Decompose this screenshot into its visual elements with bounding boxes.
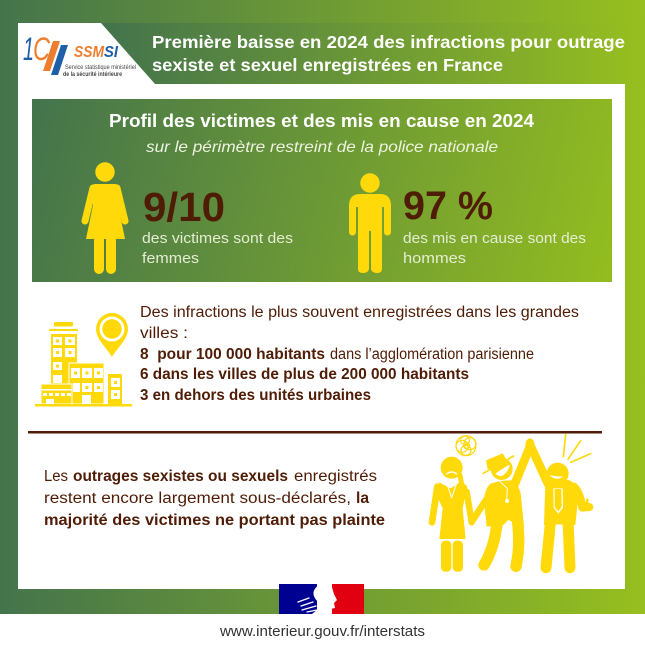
text block: urban distribution: 8 pour 100 000 habitants — [140, 346, 325, 363]
icon: man — [349, 173, 391, 273]
text block: urban distribution — [140, 304, 579, 404]
icon: three figures, woman upset and men high-fiving — [432, 434, 591, 572]
stat label: women victims — [142, 230, 293, 267]
text block: under-reporting: Les — [44, 468, 68, 485]
text block: under-reporting: la — [356, 490, 369, 507]
stat label: women victims: des victimes sont des — [142, 230, 293, 247]
logo: SSMSI: Service statistique ministériel — [65, 65, 136, 71]
stat: 97 %: 97 % — [403, 184, 493, 228]
logo: SSMSI: SSM — [74, 44, 105, 61]
text block: urban distribution: villes : — [140, 325, 188, 342]
title: sexiste et sexuel enregistrées en France — [152, 55, 503, 75]
text block: under-reporting: outrages sexistes ou sexuels — [73, 468, 288, 485]
text block: urban distribution: 3 en dehors des unités urbaines — [140, 387, 371, 404]
shout lines — [563, 434, 591, 462]
icon: woman — [85, 162, 125, 274]
text block: urban distribution: dans l’agglomération parisienne — [330, 346, 534, 363]
text block: urban distribution: Des infractions le plus souvent enregistrées dans les grandes — [140, 304, 579, 321]
logo: French Republic flag — [279, 584, 364, 614]
icon: city buildings with map pin — [35, 313, 132, 406]
text block: under-reporting: enregistrés — [294, 468, 377, 485]
logo: SSMSI: SI — [104, 44, 119, 61]
scribble: anger — [456, 436, 476, 456]
text block: under-reporting: majorité des victimes ne portant pas plainte — [44, 512, 385, 529]
stat: 9/10: 9/10 — [143, 184, 225, 230]
footer URL: www.interieur.gouv.fr/interstats — [219, 623, 425, 640]
text block: under-reporting — [44, 468, 385, 529]
panel subheading: sur le périmètre restreint de la police nationale — [146, 139, 498, 156]
logo: SSMSI: 1 — [23, 31, 34, 67]
man with tie figure — [532, 448, 589, 568]
logo: SSMSI — [23, 31, 136, 78]
stat label: women victims: femmes — [142, 250, 199, 267]
woman figure — [432, 457, 472, 572]
panel heading: Profil des victimes et des mis en cause en 2024 — [109, 110, 535, 131]
header band — [101, 23, 645, 84]
title: Première baisse en 2024 des infractions pour outrage — [152, 32, 625, 52]
stat label: male suspects: hommes — [403, 250, 466, 267]
title — [152, 32, 625, 75]
logo: SSMSI: de la sécurité intérieure — [63, 72, 123, 78]
text block: urban distribution: 6 dans les villes de plus de 200 000 habitants — [140, 366, 469, 383]
stat label: male suspects — [403, 230, 586, 267]
panel: victim and suspect profile — [32, 99, 612, 282]
logo: SSMSI: C — [33, 31, 51, 67]
man with hat figure — [472, 438, 535, 566]
stat label: male suspects: des mis en cause sont des — [403, 230, 586, 247]
text block: under-reporting: restent encore largement sous-déclarés, — [44, 490, 351, 507]
